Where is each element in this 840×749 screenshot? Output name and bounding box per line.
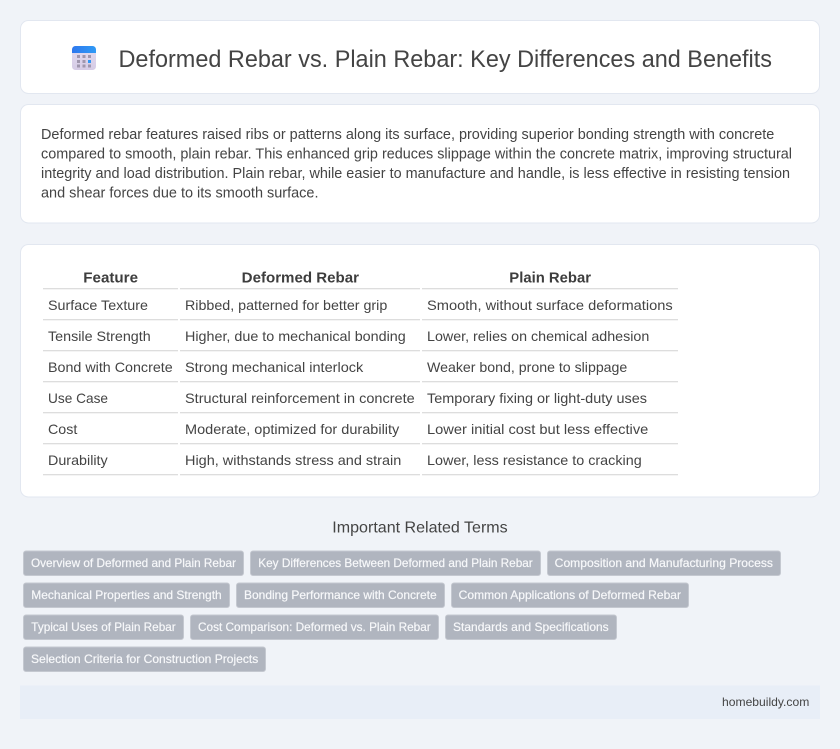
panel: header	[20, 20, 820, 94]
row: tensile strength: Higher, due to mechanical bonding	[185, 328, 406, 344]
tag: selection criteria	[24, 647, 266, 672]
tag: bonding performance: Bonding Performance with Concrete	[244, 588, 437, 602]
intro paragraph	[41, 127, 792, 202]
row: use case: Structural reinforcement in concrete	[185, 390, 415, 406]
row: surface texture: Ribbed, patterned for better grip	[185, 297, 388, 313]
row: tensile strength: Tensile Strength	[48, 328, 151, 344]
tag: composition	[548, 551, 780, 576]
row: tensile strength	[43, 328, 678, 351]
title: Deformed Rebar vs. Plain Rebar: Key Differences and Benefits	[118, 46, 772, 73]
related terms tags	[24, 551, 780, 672]
row: cost	[43, 421, 678, 444]
row: cost: Cost	[48, 421, 77, 437]
intro paragraph: Deformed rebar features raised ribs or patterns along its surface, providing superior bonding strength with concrete	[41, 127, 774, 143]
tag: typical uses	[24, 615, 184, 640]
tag: composition: Composition and Manufacturing Process	[555, 556, 773, 570]
tag: standards: Standards and Specifications	[453, 620, 609, 634]
table header row: Plain Rebar	[509, 270, 591, 286]
tag: overview: Overview of Deformed and Plain Rebar	[31, 556, 236, 570]
table header row: Feature	[83, 270, 138, 286]
footer source text: homebuildy.com	[722, 695, 809, 709]
tag: key differences: Key Differences Between Deformed and Plain Rebar	[258, 556, 533, 570]
heading: important related terms: Important Related Terms	[332, 520, 508, 537]
tag: overview	[24, 551, 244, 576]
tag: standards	[446, 615, 616, 640]
table header row: Deformed Rebar	[242, 270, 359, 286]
intro paragraph: and shear forces due to its smooth surface.	[41, 186, 318, 202]
row: use case: Temporary fixing or light-duty uses	[427, 390, 647, 406]
tag: typical uses: Typical Uses of Plain Rebar	[31, 620, 176, 634]
row: bond with concrete	[43, 359, 678, 382]
row: bond with concrete: Strong mechanical interlock	[185, 359, 364, 375]
row: bond with concrete: Bond with Concrete	[48, 359, 173, 375]
tag: common applications: Common Applications of Deformed Rebar	[459, 588, 681, 602]
intro paragraph: compared to smooth, plain rebar. This enhanced grip reduces slippage within the concrete matrix, improving structural	[41, 146, 792, 162]
footer	[20, 686, 820, 719]
row: tensile strength: Lower, relies on chemical adhesion	[427, 328, 649, 344]
table header row	[43, 270, 678, 289]
tag: mechanical properties	[24, 583, 230, 608]
tag: common applications	[452, 583, 688, 608]
row: durability: Durability	[48, 452, 108, 468]
tag: bonding performance	[236, 583, 444, 608]
tag: cost comparison: Cost Comparison: Deformed vs. Plain Rebar	[198, 620, 431, 634]
row: durability: High, withstands stress and strain	[185, 452, 401, 468]
icon: calendar	[72, 46, 96, 70]
row: use case	[43, 390, 678, 413]
intro paragraph: integrity and load distribution. Plain rebar, while easier to manufacture and handle, is less effective in resisting tension	[41, 166, 790, 182]
tag: cost comparison	[190, 615, 438, 640]
row: surface texture	[43, 297, 678, 320]
row: surface texture: Smooth, without surface deformations	[427, 297, 673, 313]
row: surface texture: Surface Texture	[48, 297, 148, 313]
row: durability: Lower, less resistance to cracking	[427, 452, 642, 468]
tag: key differences	[250, 551, 540, 576]
row: use case: Use Case	[48, 390, 108, 406]
tag: mechanical properties: Mechanical Properties and Strength	[31, 588, 222, 602]
row: durability	[43, 452, 678, 475]
tag: selection criteria: Selection Criteria for Construction Projects	[31, 652, 258, 666]
row: bond with concrete: Weaker bond, prone to slippage	[427, 359, 628, 375]
panel: comparison table	[20, 244, 820, 497]
row: cost: Lower initial cost but less effective	[427, 421, 649, 437]
row: cost: Moderate, optimized for durability	[185, 421, 399, 437]
panel: introduction	[20, 104, 820, 223]
